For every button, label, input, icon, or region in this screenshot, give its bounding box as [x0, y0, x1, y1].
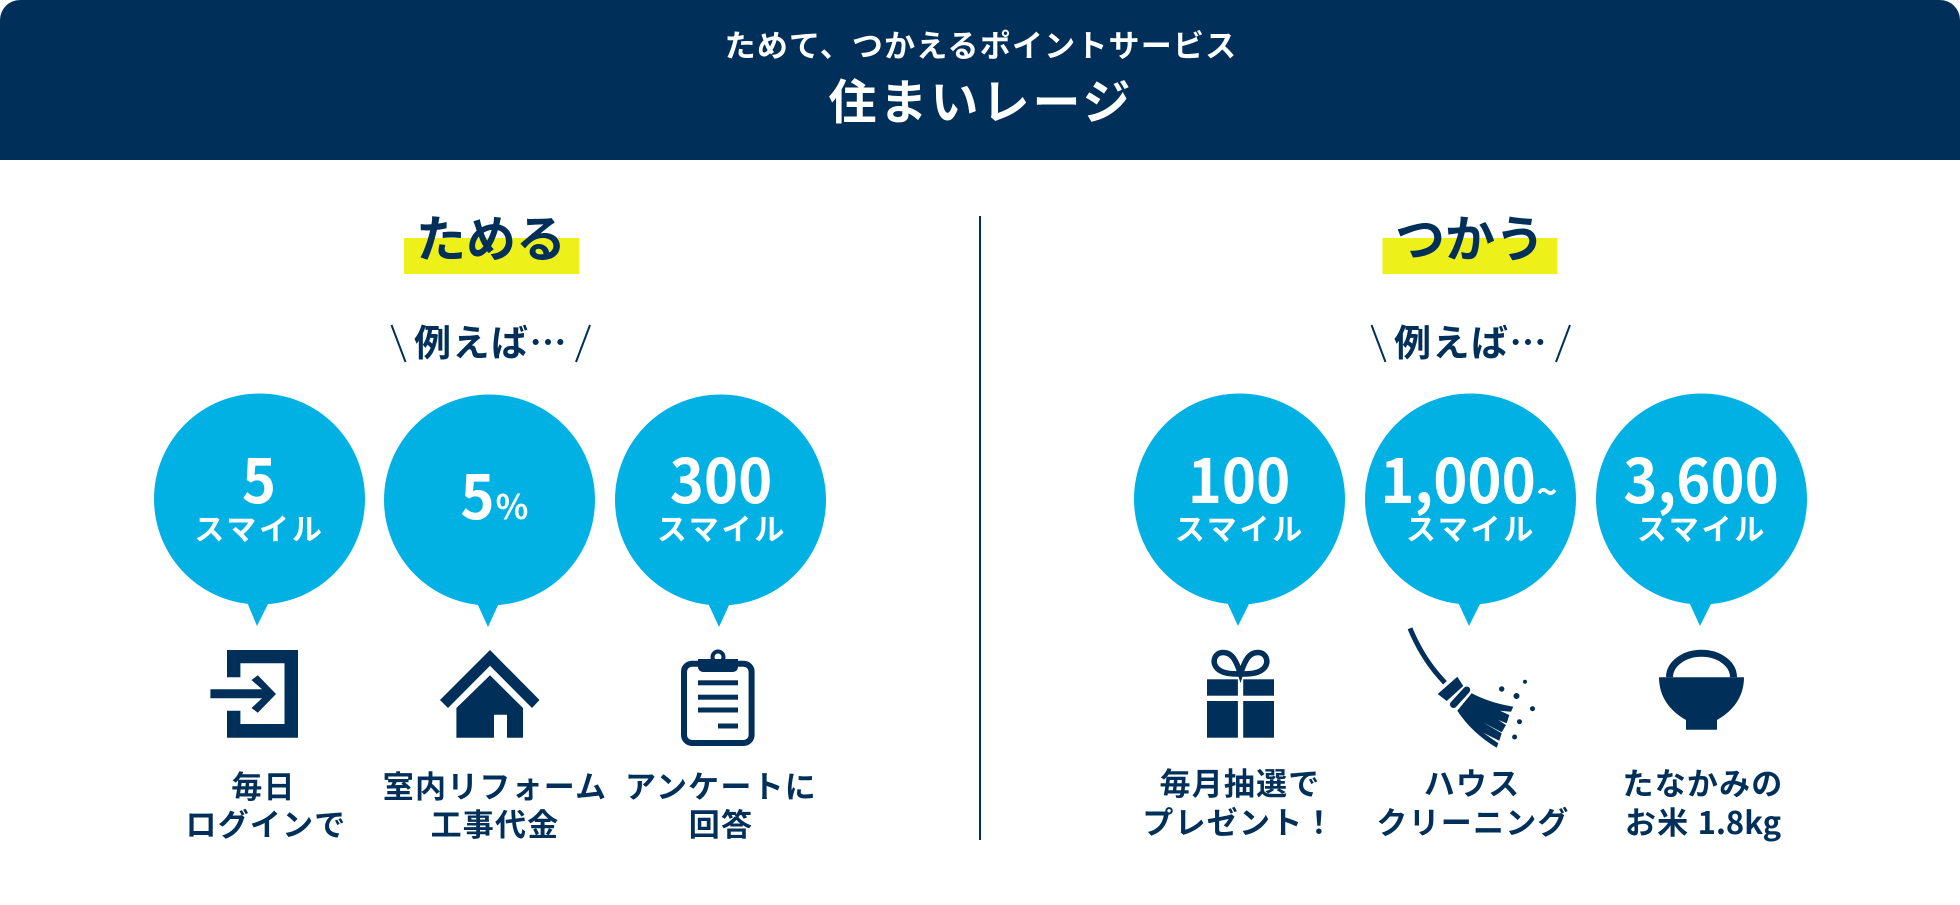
bubble: 1000 smiles — [1365, 394, 1576, 626]
divider — [979, 216, 981, 840]
label: たなかみのお米 1.8kg — [1622, 759, 1784, 843]
label: たなかみのお米 1.8kg: たなかみの — [1622, 759, 1784, 804]
icon: gift — [1207, 652, 1274, 738]
label: ハウスクリーニング: クリーニング — [1376, 798, 1570, 843]
icon: broom — [1410, 628, 1535, 748]
label: 毎月抽選でプレゼント！ — [1142, 759, 1336, 843]
label: アンケートに回答 — [625, 762, 817, 845]
label: 毎日ログインで: ログインで — [186, 800, 346, 845]
label: 毎月抽選でプレゼント！: プレゼント！ — [1142, 798, 1336, 843]
bubble: 300 smiles: 300 — [670, 433, 772, 521]
icon: login — [210, 650, 298, 738]
label: ハウスクリーニング — [1376, 759, 1570, 843]
example label left: 例えば… — [414, 313, 568, 367]
bubble: 300 smiles: スマイル — [657, 505, 787, 549]
bubble: 5 smiles — [154, 394, 365, 626]
label: 毎月抽選でプレゼント！: 毎月抽選で — [1160, 759, 1320, 804]
bubble: 5 percent: 5 — [460, 449, 495, 537]
bubble: 5 smiles: スマイル — [194, 505, 325, 549]
bubble: 5 percent: % — [496, 480, 528, 529]
bubble: 300 smiles — [615, 394, 826, 627]
heading: つかう: つかう — [1395, 200, 1545, 272]
bubble: 3600 smiles: 3,600 — [1623, 433, 1779, 521]
header subtitle: ためて、つかえるポイントサービス — [725, 21, 1237, 66]
bubble: 100 smiles — [1134, 394, 1345, 626]
label: アンケートに回答: 回答 — [689, 800, 753, 845]
bubble: 3600 smiles: スマイル — [1637, 505, 1767, 549]
bubble: 5 percent — [384, 394, 595, 627]
icon: rice bowl — [1659, 653, 1744, 730]
icon: house — [440, 650, 540, 738]
bubble: 100 smiles: 100 — [1188, 433, 1290, 521]
label: ハウスクリーニング: ハウス — [1424, 759, 1520, 804]
label: たなかみのお米 1.8kg: お米 1.8kg — [1625, 798, 1781, 843]
bubble: 1000 smiles: 1,000 — [1380, 433, 1536, 521]
label: 室内リフォーム工事代金: 工事代金 — [431, 800, 559, 845]
bubble: 1000 smiles: ~ — [1536, 464, 1558, 516]
header title: 住まいレージ — [828, 63, 1134, 133]
label: 毎日ログインで: 毎日 — [231, 762, 296, 807]
label: 室内リフォーム工事代金: 室内リフォーム — [383, 762, 607, 807]
bubble: 1000 smiles: スマイル — [1406, 505, 1536, 549]
heading: ためる: ためる — [416, 200, 566, 272]
bubble: 3600 smiles — [1596, 394, 1807, 626]
label: 毎日ログインで — [186, 762, 346, 845]
bubble: 5 smiles: 5 — [242, 433, 276, 521]
header band — [0, 0, 1960, 160]
label: 室内リフォーム工事代金 — [383, 762, 607, 845]
icon: clipboard — [684, 652, 752, 743]
label: アンケートに回答: アンケートに — [625, 762, 817, 807]
example label right: 例えば… — [1394, 313, 1548, 367]
bubble: 100 smiles: スマイル — [1175, 505, 1305, 549]
